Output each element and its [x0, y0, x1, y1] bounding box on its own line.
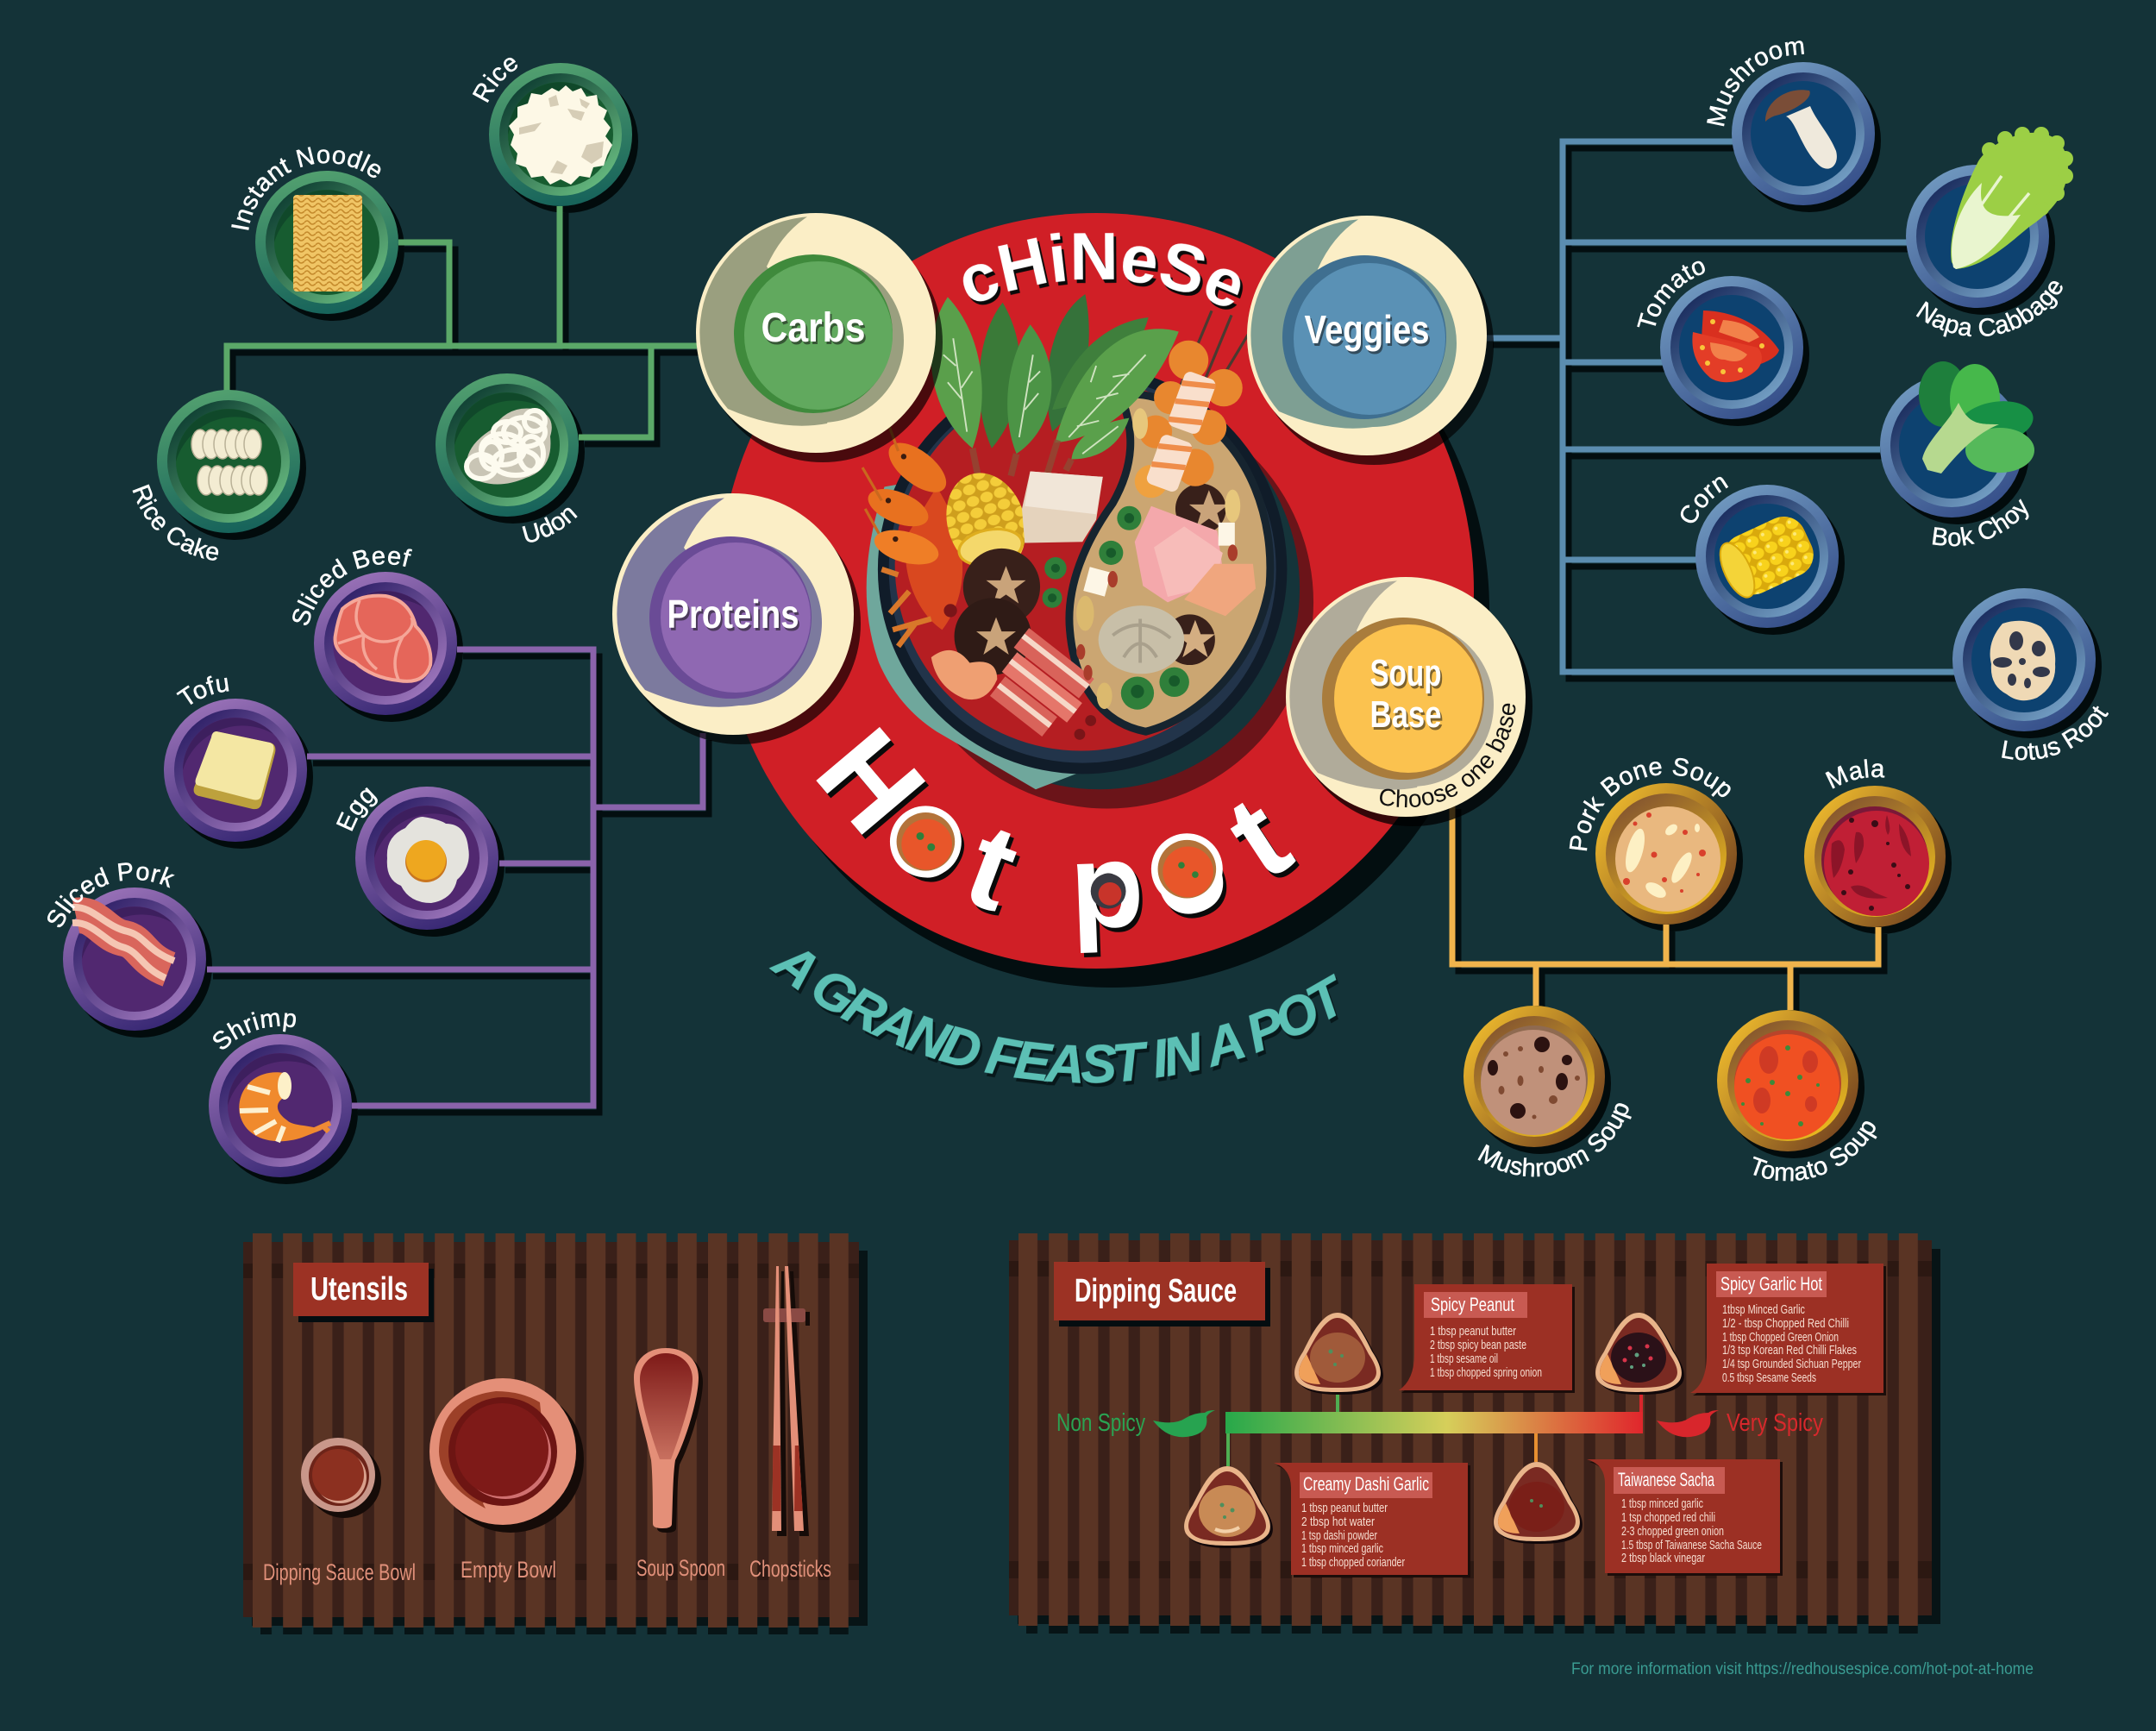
label: Mushroom	[1707, 41, 1804, 126]
icon: chopsticks	[763, 1266, 810, 1536]
card: spicy garlic hot: 1/2 - tbsp Chopped Red Chilli	[1722, 1316, 1849, 1331]
heading: utensils	[293, 1263, 434, 1322]
label: Pork Bone Soup	[1570, 757, 1731, 850]
bowl: spicy peanut	[1294, 1313, 1383, 1395]
label: Lotus Root	[2002, 706, 2109, 761]
footer source note: For more information visit https://redhousespice.com/hot-pot-at-home	[1571, 1660, 2034, 1678]
broth: mild side	[1069, 394, 1270, 731]
label: Instant Noodle	[231, 147, 381, 230]
icon: lotus root	[1990, 621, 2055, 700]
label: Sliced Pork	[47, 862, 175, 928]
skewers	[1135, 310, 1256, 498]
icon: mala broth	[1821, 806, 1929, 916]
card: creamy dashi garlic	[1274, 1463, 1470, 1577]
label: soup spoon: Soup Spoon	[636, 1555, 725, 1581]
connector lines: carbs	[227, 206, 703, 444]
card: spicy peanut: 1 tbsp sesame oil	[1430, 1352, 1498, 1366]
icon: rice cake	[191, 430, 267, 495]
icon: tofu	[194, 731, 275, 809]
category: Soup Base: Soup	[1369, 652, 1442, 694]
icon: beef	[335, 596, 430, 681]
category: Veggies: Veggies	[1304, 307, 1430, 352]
card: spicy peanut	[1399, 1284, 1575, 1393]
card: creamy dashi garlic: 1 tsp dashi powder	[1301, 1528, 1377, 1543]
corn	[934, 462, 1038, 582]
card: taiwanese sacha	[1587, 1459, 1783, 1576]
label: chopsticks: Chopsticks	[749, 1556, 831, 1582]
card: spicy peanut: 1 tbsp chopped spring onion	[1430, 1365, 1542, 1380]
card: creamy dashi garlic: 1 tbsp chopped coriander	[1301, 1555, 1405, 1570]
label: Udon	[523, 507, 578, 543]
icon: empty bowl	[429, 1378, 584, 1533]
soup: mushroom	[1463, 1006, 1650, 1205]
heading: utensils: Utensils	[310, 1271, 408, 1308]
spice scale bar	[1225, 1391, 1643, 1466]
veggie: bok choy	[1880, 361, 2040, 565]
category: Veggies	[1247, 216, 1494, 465]
icon: red chili	[1657, 1410, 1719, 1437]
card: taiwanese sacha: 2 tbsp black vinegar	[1621, 1551, 1705, 1565]
card: spicy peanut: 1 tbsp peanut butter	[1430, 1324, 1516, 1339]
card: taiwanese sacha: 1 tbsp minced garlic	[1621, 1496, 1703, 1511]
protein: egg	[329, 778, 498, 930]
bowl: taiwanese sacha	[1494, 1462, 1583, 1544]
title: Hot pot: Hot pot	[816, 726, 1300, 957]
icon: corn	[1713, 509, 1821, 604]
veggie: corn	[1670, 464, 1839, 628]
icon: napa cabbage	[1951, 127, 2073, 269]
bowl: spicy garlic hot	[1595, 1313, 1684, 1395]
carbs: udon	[436, 373, 579, 543]
label: Tofu	[176, 676, 229, 705]
card: spicy garlic hot: 1/4 tsp Grounded Sichuan Pepper	[1722, 1357, 1861, 1371]
leafy greens	[931, 294, 1179, 476]
card: taiwanese sacha: 2-3 chopped green onion	[1621, 1524, 1724, 1539]
card: taiwanese sacha: Taiwanese Sacha	[1618, 1469, 1714, 1490]
connector lines: soup base	[1452, 802, 1884, 1017]
label: Tomato	[1637, 260, 1705, 328]
soup: tomato	[1717, 1010, 1893, 1206]
soup bowl letter decorations	[890, 806, 1223, 909]
veggie: mushroom	[1685, 13, 1875, 205]
label: non spicy: Non Spicy	[1056, 1409, 1145, 1437]
card: creamy dashi garlic: 1 tbsp minced garlic	[1301, 1541, 1383, 1556]
soup: pork bone	[1543, 726, 1744, 925]
icon: green chili	[1153, 1410, 1215, 1437]
label: Bok Choy	[1932, 499, 2028, 547]
label: Tomato Soup	[1752, 1121, 1877, 1182]
protein: shrimp	[204, 994, 352, 1177]
protein: sliced pork	[30, 838, 206, 1031]
label: Rice	[473, 57, 517, 103]
card: creamy dashi garlic: Creamy Dashi Garlic	[1303, 1473, 1429, 1495]
icon: udon	[467, 409, 552, 485]
veggie: napa cabbage	[1906, 127, 2078, 356]
label: very spicy	[1657, 1409, 1823, 1437]
soup: mala	[1804, 750, 1946, 927]
dumpling and greens	[1043, 506, 1189, 710]
card: spicy garlic hot: 1/3 tsp Korean Red Chilli Flakes	[1722, 1343, 1857, 1358]
connector lines: veggies	[1487, 141, 1960, 679]
hot pot illustration	[862, 294, 1313, 809]
label: very spicy: Very Spicy	[1727, 1409, 1823, 1437]
label: Sliced Beef	[292, 549, 412, 625]
icon: tomato slices	[1692, 310, 1779, 382]
icon: soup spoon	[634, 1348, 703, 1533]
label: dipping sauce bowl: Dipping Sauce Bowl	[263, 1559, 416, 1585]
category: Carbs	[696, 213, 943, 462]
label: Egg	[336, 787, 378, 831]
icon: tomato broth	[1734, 1030, 1841, 1139]
pink meat slices	[1135, 506, 1256, 616]
card: taiwanese sacha: 1 tsp chopped red chili	[1621, 1510, 1715, 1525]
panel: utensils	[243, 1233, 868, 1634]
label: Mala	[1825, 759, 1885, 788]
carbs: rice	[473, 57, 632, 206]
carbs: rice cake	[133, 390, 300, 561]
label: Corn	[1680, 476, 1728, 523]
card: spicy peanut: Spicy Peanut	[1431, 1294, 1514, 1315]
heading: dipping sauce	[1054, 1262, 1270, 1326]
icon: mushroom broth	[1481, 1025, 1588, 1135]
card: spicy garlic hot: Spicy Garlic Hot	[1720, 1273, 1822, 1295]
card: spicy peanut: 2 tbsp spicy bean paste	[1430, 1338, 1526, 1352]
label: empty bowl: Empty Bowl	[461, 1557, 556, 1583]
carbs: instant noodle	[231, 147, 398, 314]
category: Proteins	[612, 493, 861, 744]
tofu	[1022, 472, 1103, 543]
category: Proteins: Proteins	[667, 592, 799, 637]
card: creamy dashi garlic: 2 tbsp hot water	[1301, 1515, 1375, 1529]
title: Chinese: cHiNeSe	[962, 233, 1244, 310]
bowl: creamy dashi garlic	[1184, 1466, 1273, 1548]
heading: dipping sauce: Dipping Sauce	[1075, 1273, 1237, 1309]
card: spicy garlic hot: 1tbsp Minced Garlic	[1722, 1302, 1805, 1317]
label: Rice Cake	[133, 485, 219, 561]
label: Mushroom Soup	[1478, 1103, 1632, 1176]
shrimp ball, beef slices	[931, 628, 1099, 743]
category: Soup Base: Base	[1369, 693, 1442, 736]
category: Carbs: Carbs	[761, 305, 866, 351]
label: Shrimp	[213, 1012, 297, 1049]
veggie: tomato	[1623, 243, 1803, 419]
icon: noodle block	[293, 195, 362, 292]
icon: king oyster mushroom	[1765, 90, 1837, 169]
tofu cubes and beans	[943, 408, 1240, 740]
red hot pot disc	[718, 213, 1489, 988]
protein: tofu	[164, 666, 307, 842]
icon: rice	[509, 85, 612, 185]
icon: pork bone broth	[1615, 806, 1720, 912]
subtitle: A GRAND FEAST IN A POT	[769, 950, 1338, 1087]
protein: sliced beef	[292, 549, 457, 715]
veggie: lotus root	[1952, 588, 2122, 781]
connector lines: proteins	[207, 649, 709, 1113]
icon: fried egg	[387, 817, 469, 903]
icon: shrimp	[239, 1072, 330, 1142]
shrimps	[862, 421, 962, 646]
plate drop shadows	[69, 69, 2102, 1184]
icon: bacon	[72, 907, 174, 978]
card: spicy garlic hot: 1 tbsp Chopped Green Onion	[1722, 1330, 1839, 1345]
card: creamy dashi garlic: 1 tbsp peanut butter	[1301, 1501, 1388, 1515]
category: Soup Base	[1286, 577, 1532, 826]
shiitake mushrooms	[955, 484, 1229, 675]
icon: bok choy	[1919, 361, 2036, 474]
card: taiwanese sacha: 1.5 tbsp of Taiwanese Sacha Sauce	[1621, 1538, 1762, 1552]
card: spicy garlic hot: 0.5 tbsp Sesame Seeds	[1722, 1370, 1816, 1385]
card: spicy garlic hot	[1690, 1264, 1886, 1395]
icon: dipping sauce bowl	[301, 1438, 381, 1518]
note: choose one base: Choose one base	[1380, 704, 1516, 807]
panel: dipping sauce	[1009, 1233, 1940, 1634]
label: Napa Cabbage	[1916, 281, 2063, 337]
